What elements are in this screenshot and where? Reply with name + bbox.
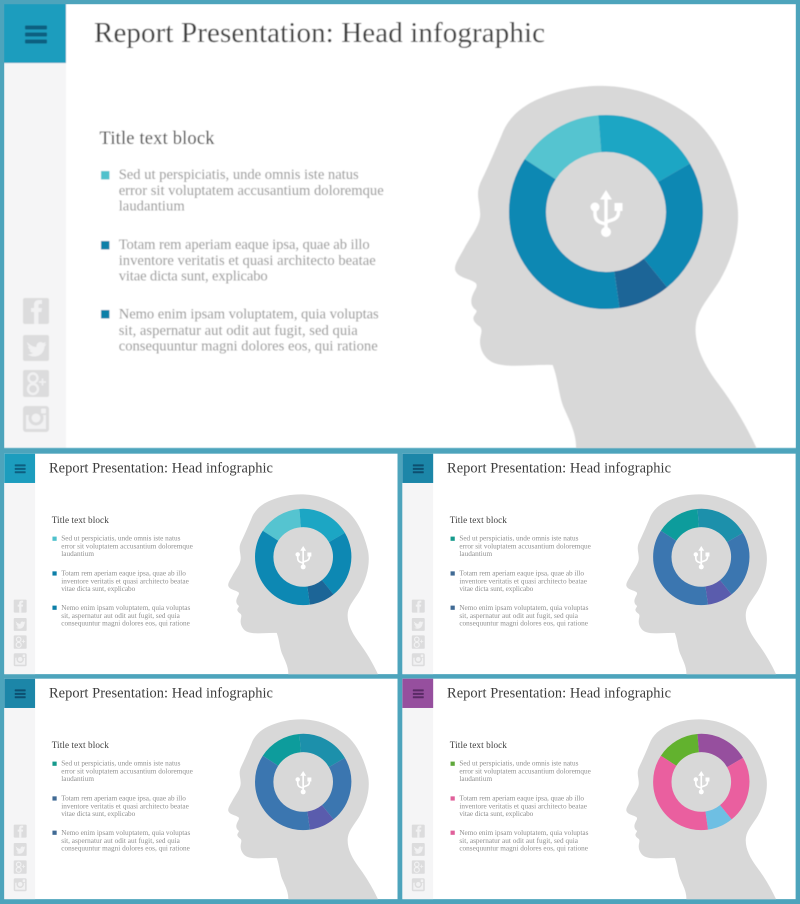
bullet 3: Nemo enim ipsam voluptatem, quia voluptas — [61, 829, 190, 837]
text block heading: Title text block — [450, 740, 507, 750]
bullet 3 — [101, 306, 379, 354]
bullet 3 — [451, 604, 589, 628]
menu block — [4, 679, 35, 708]
icon: usb — [295, 546, 311, 569]
bullet 3: sit, aspernatur aut odit aut fugit, sed quia — [61, 837, 181, 845]
bullet 1 — [451, 535, 591, 558]
bullet 1: error sit voluptatem accusantium doloremque — [459, 768, 591, 776]
panel: small slide, blue — [4, 454, 398, 674]
title: Report Presentation: Head infographic — [94, 17, 545, 49]
panel: small slide, purple and pink — [402, 679, 796, 899]
bullet 1 — [52, 535, 193, 558]
bullet 2: inventore veritatis et quasi architecto beatae — [61, 802, 189, 810]
icon: instagram — [412, 653, 425, 666]
bullet 2: vitae dicta sunt, explicabo — [459, 585, 534, 593]
bullet 3: Nemo enim ipsam voluptatem, quia voluptas — [459, 829, 589, 837]
bullet 2: vitae dicta sunt, explicabo — [61, 585, 136, 593]
icon: facebook — [412, 600, 425, 613]
donut chart — [662, 743, 740, 821]
bullet 3: sit, aspernatur aut odit aut fugit, sed quia — [459, 612, 579, 620]
bullet 1: error sit voluptatem accusantium doloremque — [459, 543, 591, 551]
panel: small slide, teal and indigo, top right — [402, 454, 796, 674]
head silhouette — [455, 86, 757, 448]
icon: instagram — [14, 878, 27, 891]
donut chart — [527, 133, 684, 291]
icon: facebook — [14, 600, 27, 613]
donut chart — [264, 518, 342, 596]
bullet 1: error sit voluptatem accusantium doloremque — [61, 768, 193, 776]
icon: twitter — [412, 843, 425, 856]
title: Report Presentation: Head infographic — [49, 461, 273, 477]
icon: facebook — [412, 825, 425, 838]
icon: facebook — [14, 825, 27, 838]
bullet 2: Totam rem aperiam eaque ipsa, quae ab illo — [119, 237, 370, 253]
bullet 3: Nemo enim ipsam voluptatem, quia voluptas — [119, 306, 379, 322]
bullet 1: laudantium — [61, 775, 94, 783]
bullet 3: consequuntur magni dolores eos, qui ratione — [459, 845, 588, 853]
bullet 1: laudantium — [459, 775, 492, 783]
bullet 1 — [52, 760, 193, 783]
text block heading: Title text block — [100, 129, 215, 149]
bullet 3: Nemo enim ipsam voluptatem, quia voluptas — [61, 604, 190, 612]
bullet 2 — [52, 569, 189, 593]
menu block — [402, 679, 433, 708]
bullet 2: Totam rem aperiam eaque ipsa, quae ab illo — [61, 794, 186, 802]
icon: google plus — [412, 860, 425, 874]
slide background — [4, 4, 796, 448]
icon: usb — [694, 771, 709, 794]
bullet 2 — [451, 794, 587, 818]
panel: small slide, teal and indigo, bottom left — [4, 679, 398, 899]
bullet 1 — [451, 760, 591, 783]
bullet 2: inventore veritatis et quasi architecto beatae — [459, 802, 587, 810]
bullet 2: vitae dicta sunt, explicabo — [459, 810, 534, 818]
bullet 1: error sit voluptatem accusantium doloremque — [119, 183, 384, 199]
text block heading: Title text block — [450, 515, 507, 525]
icon: google plus — [412, 635, 425, 649]
donut chart — [662, 518, 740, 596]
icon: google plus — [14, 860, 27, 874]
head silhouette — [626, 494, 776, 674]
sidebar — [4, 4, 66, 448]
bullet 1: error sit voluptatem accusantium doloremque — [61, 543, 193, 551]
bullet 3: consequuntur magni dolores eos, qui ratione — [459, 620, 588, 628]
bullet 1: Sed ut perspiciatis, unde omnis iste natus — [459, 535, 579, 543]
bullet 3: consequuntur magni dolores eos, qui ratione — [119, 338, 378, 354]
icon: google plus — [23, 370, 49, 397]
icon: twitter — [23, 335, 49, 361]
bullet 3: sit, aspernatur aut odit aut fugit, sed quia — [459, 837, 579, 845]
menu block — [4, 4, 66, 63]
text block heading: Title text block — [52, 515, 109, 525]
slide background — [402, 679, 796, 899]
title: Report Presentation: Head infographic — [49, 686, 273, 702]
sidebar — [4, 679, 35, 899]
icon: instagram — [23, 406, 49, 432]
bullet 2: vitae dicta sunt, explicabo — [119, 268, 268, 284]
bullet 1: Sed ut perspiciatis, unde omnis iste natus — [459, 760, 579, 768]
bullet 2 — [52, 794, 189, 818]
bullet 2: vitae dicta sunt, explicabo — [61, 810, 136, 818]
bullet 1: laudantium — [119, 198, 185, 214]
bullet 2: inventore veritatis et quasi architecto beatae — [459, 577, 587, 585]
icon: twitter — [14, 618, 27, 631]
menu block — [4, 454, 35, 483]
bullet 1: Sed ut perspiciatis, unde omnis iste natus — [61, 760, 181, 768]
panel: main slide — [4, 4, 796, 448]
bullet 2: inventore veritatis et quasi architecto beatae — [61, 577, 189, 585]
bullet 3 — [52, 829, 190, 853]
bullet 1: laudantium — [459, 550, 492, 558]
sidebar — [402, 454, 433, 674]
slide background — [402, 454, 796, 674]
bullet 2: Totam rem aperiam eaque ipsa, quae ab illo — [459, 794, 584, 802]
title: Report Presentation: Head infographic — [447, 686, 671, 702]
bullet 1 — [101, 167, 384, 214]
bullet 3: consequuntur magni dolores eos, qui ratione — [61, 845, 190, 853]
bullet 2: inventore veritatis et quasi architecto beatae — [119, 253, 376, 269]
bullet 2: Totam rem aperiam eaque ipsa, quae ab illo — [61, 569, 186, 577]
bullet 3: consequuntur magni dolores eos, qui ratione — [61, 620, 190, 628]
bullet 3 — [451, 829, 589, 853]
menu block — [402, 454, 433, 483]
bullet 1: Sed ut perspiciatis, unde omnis iste natus — [61, 535, 181, 543]
slide background — [4, 679, 398, 899]
sidebar — [4, 454, 35, 674]
text block heading: Title text block — [52, 740, 109, 750]
head silhouette — [626, 719, 776, 899]
bullet 2 — [451, 569, 587, 593]
bullet 2 — [101, 237, 376, 284]
slide background — [4, 454, 398, 674]
icon: facebook — [23, 298, 49, 324]
bullet 3: sit, aspernatur aut odit aut fugit, sed quia — [61, 612, 181, 620]
icon: usb — [590, 190, 622, 237]
bullet 1: Sed ut perspiciatis, unde omnis iste natus — [119, 167, 359, 183]
head silhouette — [228, 719, 378, 899]
title: Report Presentation: Head infographic — [447, 461, 671, 477]
icon: instagram — [412, 878, 425, 891]
icon: instagram — [14, 653, 27, 666]
icon: twitter — [412, 618, 425, 631]
bullet 3: Nemo enim ipsam voluptatem, quia voluptas — [459, 604, 589, 612]
donut chart — [264, 743, 342, 821]
icon: twitter — [14, 843, 27, 856]
sidebar — [402, 679, 433, 899]
bullet 3: sit, aspernatur aut odit aut fugit, sed quia — [119, 323, 358, 339]
bullet 1: laudantium — [61, 550, 94, 558]
head silhouette — [228, 494, 378, 674]
icon: usb — [295, 771, 311, 794]
icon: usb — [694, 546, 709, 569]
icon: google plus — [14, 635, 27, 649]
bullet 3 — [52, 604, 190, 628]
bullet 2: Totam rem aperiam eaque ipsa, quae ab illo — [459, 569, 584, 577]
